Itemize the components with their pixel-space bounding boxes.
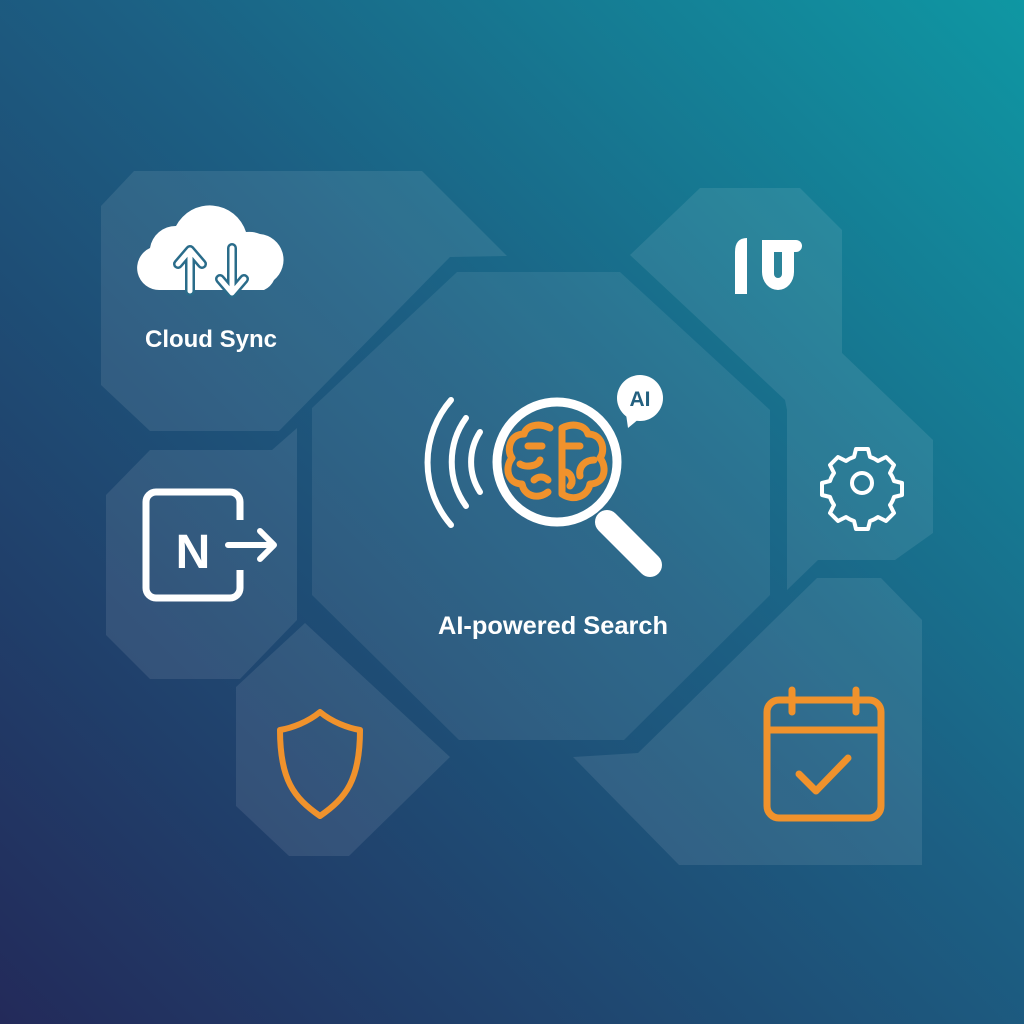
icon: shield bbox=[280, 712, 360, 816]
label: cloud sync: Cloud Sync bbox=[145, 326, 277, 353]
icon: sound waves bbox=[428, 400, 480, 525]
panel: AI-powered search (center) bbox=[312, 272, 770, 740]
icon: iU logo bbox=[735, 238, 802, 294]
panel: calendar bbox=[573, 578, 922, 865]
panel: top right with gear bbox=[630, 188, 933, 590]
icon: N export bbox=[146, 492, 274, 598]
icon: AI speech bubble bbox=[617, 375, 663, 428]
icon: gear bbox=[822, 449, 902, 529]
icon: calendar bbox=[767, 690, 881, 818]
panel: N export bbox=[106, 428, 297, 679]
icon: AI speech bubble: AI bbox=[630, 388, 650, 411]
panel: shield bbox=[236, 623, 450, 856]
icon: N export: N bbox=[176, 526, 210, 579]
icon: cloud sync bbox=[137, 205, 284, 293]
panel: cloud sync bbox=[101, 171, 507, 431]
label: AI-powered search: AI-powered Search bbox=[438, 612, 668, 640]
icon: magnifier with brain bbox=[497, 402, 650, 565]
